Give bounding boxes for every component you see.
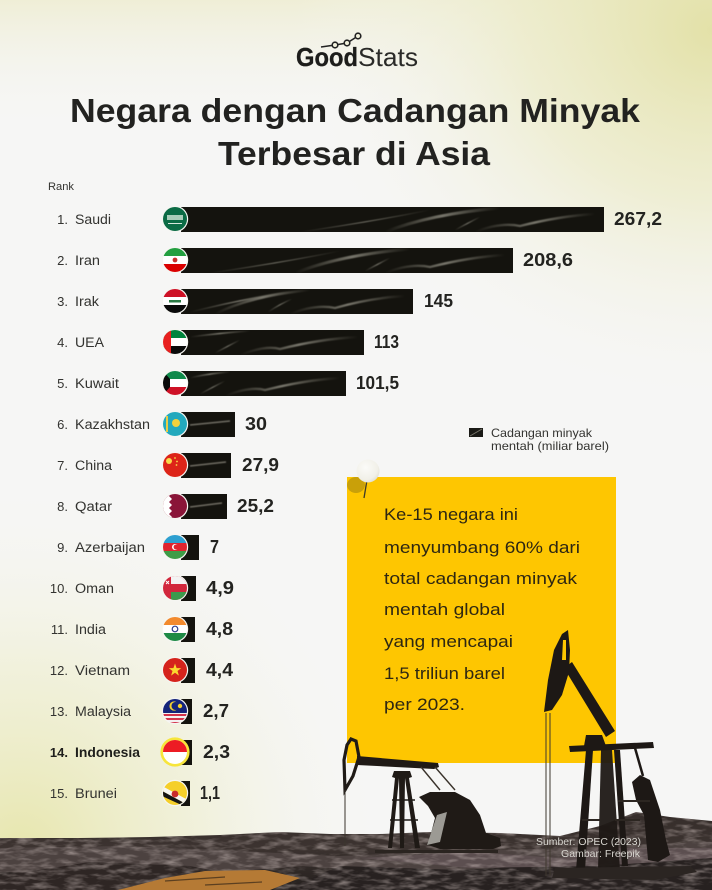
texture: soil noise [0,812,712,890]
flag: Oman [163,576,188,600]
rank header: Rank [48,181,74,193]
row 2: Iran: 2. [57,253,68,268]
row 8: Qatar: 8. [57,499,68,514]
row 15: Brunei: 15. [50,786,68,801]
callout: yellow note: total cadangan minyak [384,569,578,588]
flag: Vietnam [162,657,188,683]
row 13: Malaysia: 13. [50,704,68,719]
row 4: UEA [57,330,399,355]
row 14: Indonesia: Indonesia [75,745,141,760]
flag: Azerbaijan [163,535,188,559]
row 8: Qatar: 25,2 [237,496,274,516]
row 7: China: 7. [57,458,68,473]
row 5: Kuwait: 5. [57,376,68,391]
row 6: Kazakhstan [57,412,267,437]
row 10: Oman: 4,9 [206,578,234,598]
flag: Malaysia [162,698,188,724]
row 7: China: China [75,458,113,473]
row 10: Oman [50,576,234,601]
pumpjack: left [344,739,501,853]
source credit [536,836,641,860]
callout: yellow note: yang mencapai [384,632,513,651]
row 3: Irak [57,289,453,314]
row 6: Kazakhstan: 30 [245,414,267,434]
row 2: Iran [57,248,573,273]
source credit: Sumber: OPEC (2023) [536,836,641,848]
flag: Indonesia [160,737,190,767]
source credit: Gambar: Freepik [561,848,641,860]
callout: yellow note: mentah global [384,600,505,619]
row 1: Saudi: 267,2 [614,209,662,229]
row 12: Vietnam: 12. [50,663,68,678]
row 11: India: 11. [51,622,68,637]
row 10: Oman: 10. [50,581,68,596]
row 9: Azerbaijan: 7 [210,537,219,557]
puddle [118,870,300,890]
flag: China [163,453,188,477]
row 14: Indonesia: 2,3 [203,742,230,762]
flag: Saudi Arabia [163,207,188,231]
row 1: Saudi [57,207,662,232]
flag: UAE [163,330,188,354]
row 11: India [51,617,233,642]
row 12: Vietnam: 4,4 [206,660,233,680]
row 5: Kuwait: 101,5 [356,373,399,393]
row 14: Indonesia: 14. [50,745,68,760]
row 6: Kazakhstan: Kazakhstan [75,417,150,432]
logo: GoodStats [296,33,418,72]
flags [160,206,190,808]
title [70,92,641,172]
row 6: Kazakhstan: 6. [57,417,68,432]
flag: India [163,617,188,641]
row 4: UEA: UEA [75,335,104,350]
row 8: Qatar: Qatar [75,499,113,514]
row 9: Azerbaijan [57,535,219,560]
row 12: Vietnam: Vietnam [75,663,130,678]
row 3: Irak: 3. [57,294,68,309]
row 3: Irak: 145 [424,291,453,311]
row 1: Saudi: 1. [57,212,68,227]
row 11: India: 4,8 [206,619,233,639]
row 11: India: India [75,622,107,637]
row 4: UEA: 4. [57,335,68,350]
callout: yellow note: Ke-15 negara ini [384,505,518,524]
ground [0,812,712,890]
row 7: China: 27,9 [242,455,279,475]
row 15: Brunei: 1,1 [200,783,220,803]
row 3: Irak: Irak [75,294,99,309]
row 5: Kuwait [57,371,399,396]
bar chart: oil reserves [50,207,662,806]
row 13: Malaysia [50,699,229,724]
row 8: Qatar [57,494,274,519]
title: Terbesar di Asia [218,135,491,172]
flag: Kazakhstan [163,412,188,436]
callout: yellow note: 1,5 triliun barel [384,664,505,683]
row 13: Malaysia: Malaysia [75,704,132,719]
logo: GoodStats: Good [296,42,358,72]
legend [469,426,609,453]
callout: yellow note: per 2023. [384,695,465,714]
row 9: Azerbaijan: Azerbaijan [75,540,145,555]
logo: GoodStats: Stats [358,42,418,72]
icon: push pin [347,460,380,498]
row 2: Iran: Iran [75,253,100,268]
row 15: Brunei [50,781,220,806]
flag: Iran [163,248,188,272]
flag: Brunei [162,780,188,808]
row 15: Brunei: Brunei [75,786,117,801]
callout: yellow note: menyumbang 60% dari [384,538,580,557]
row 10: Oman: Oman [75,581,114,596]
row 5: Kuwait: Kuwait [75,376,119,391]
legend: Cadangan minyak [491,426,593,440]
row 7: China [57,453,279,478]
row 9: Azerbaijan: 9. [57,540,68,555]
flag: Iraq [163,289,188,313]
pumpjack: right [544,630,697,880]
flag: Kuwait [163,371,188,395]
callout: yellow note [347,477,616,763]
row 14: Indonesia [50,740,230,765]
row 4: UEA: 113 [374,332,399,352]
title: Negara dengan Cadangan Minyak [70,92,641,129]
row 13: Malaysia: 2,7 [203,701,229,721]
row 12: Vietnam [50,658,233,683]
row 2: Iran: 208,6 [523,250,573,270]
legend: mentah (miliar barel) [491,439,609,453]
row 1: Saudi: Saudi [75,212,111,227]
flag: Qatar [163,494,188,518]
